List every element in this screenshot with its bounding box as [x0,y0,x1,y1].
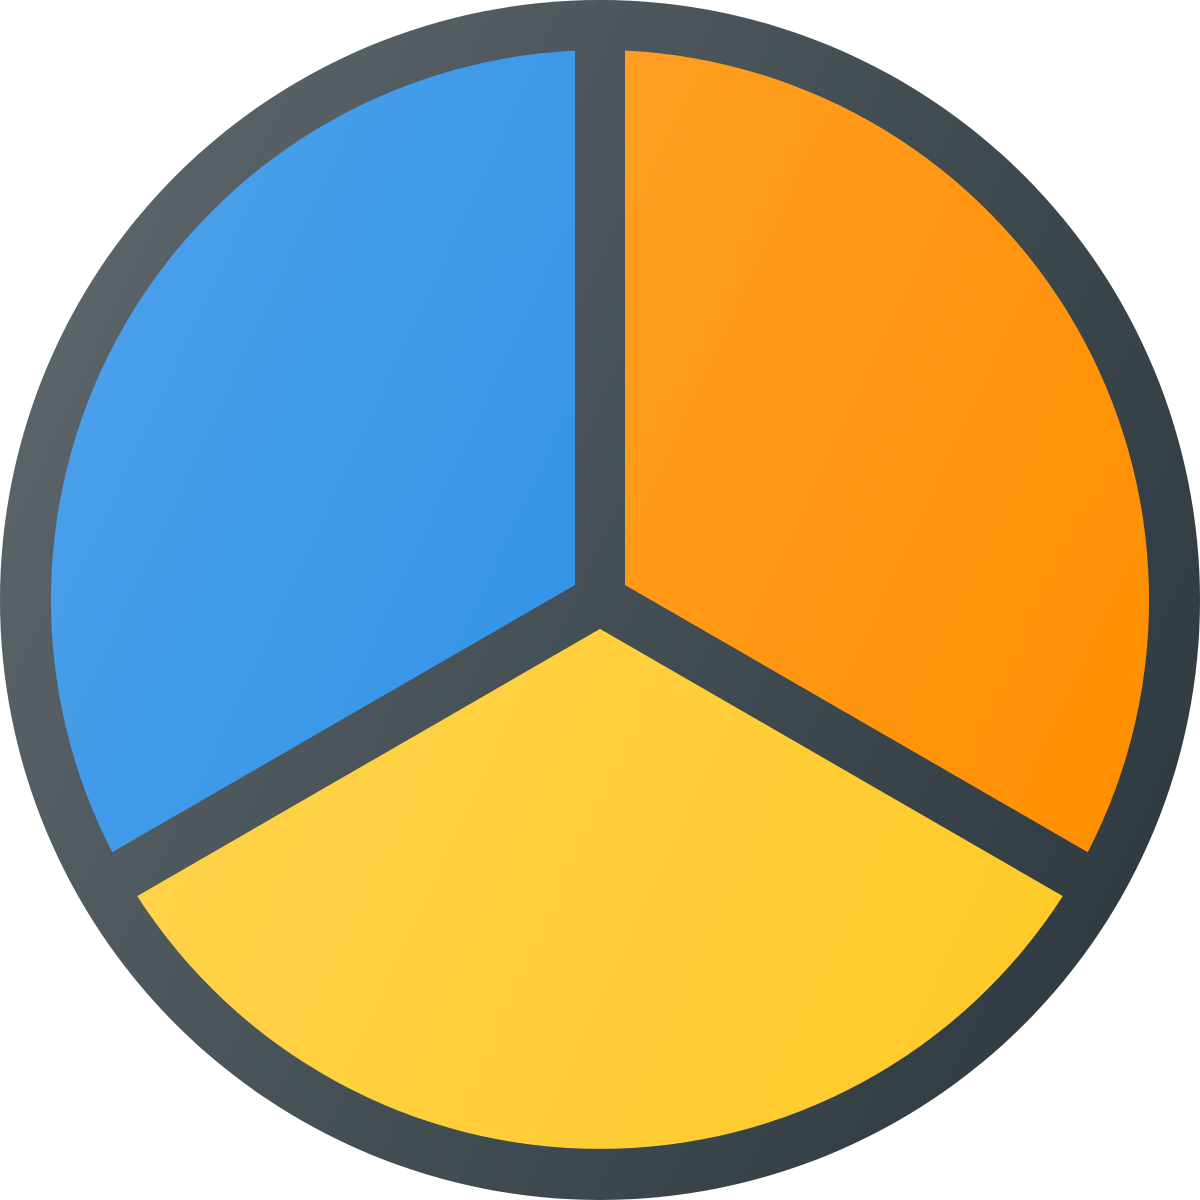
segment: blue, upper left [51,51,575,852]
segment: yellow, bottom [137,629,1063,1149]
segment: orange, upper right [625,51,1149,852]
